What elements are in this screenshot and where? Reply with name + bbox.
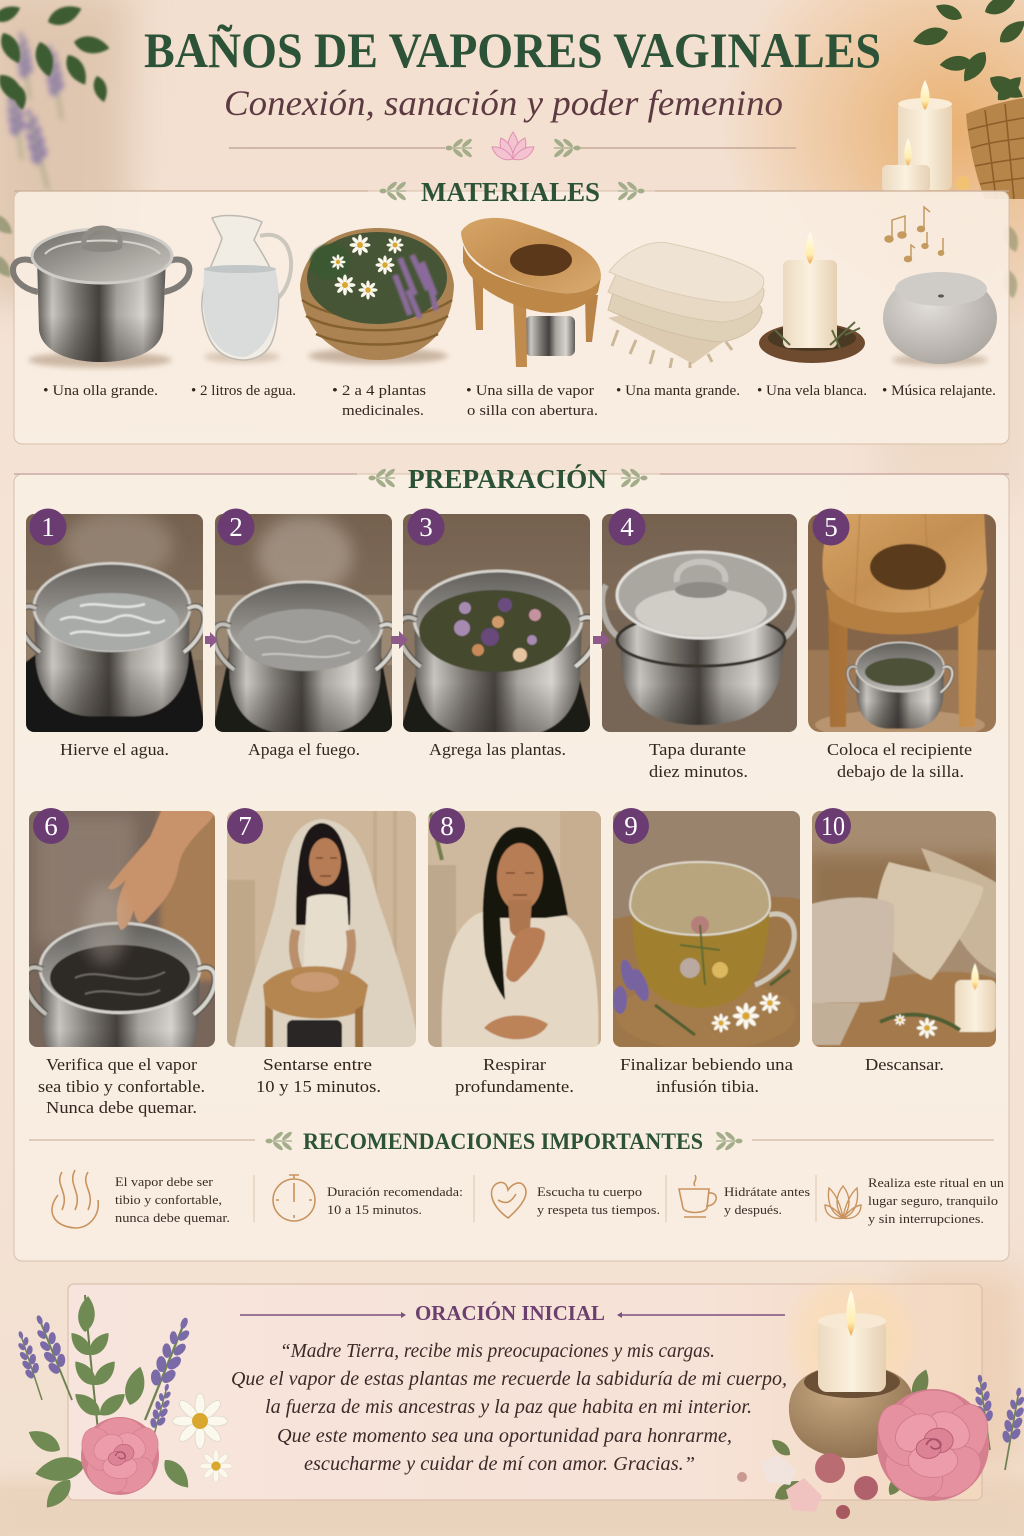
recommendation: cuerpo: y respeta tus tiempos. [537,1202,660,1217]
step 3 photo [398,510,598,736]
step 6 caption: Nunca debe quemar. [46,1098,197,1117]
floral arrangement: left [11,1295,232,1513]
prayer text [231,1340,787,1475]
item labels: o silla con abertura. [467,403,598,419]
step 7 caption [256,1055,381,1096]
step 7 caption: 10 y 15 minutos. [256,1077,381,1096]
step 6 caption [38,1055,205,1117]
step 10 photo [808,807,1000,1051]
title: BAÑOS DE VAPORES VAGINALES [144,22,881,78]
item labels: • Una silla de vapor [466,383,594,399]
step 7 photo [223,807,420,1054]
item labels: medicinales. [342,403,424,419]
panel: oración inicial [68,1284,982,1500]
panel: materiales [13,177,1009,444]
item labels [43,383,996,419]
recommendation: cuerpo: Escucha tu cuerpo [537,1184,642,1199]
step 8 caption: profundamente. [455,1077,574,1096]
plants and candles: top right [882,0,1024,199]
subtitle: Conexión, sanación y poder femenino [224,83,783,123]
item labels: • 2 a 4 plantas [332,383,426,399]
step number badges: 1 [41,512,55,542]
step 1 photo [19,510,207,736]
recommendation: lugar seguro: Realiza este ritual en un [868,1175,1005,1190]
panel: preparación y recomendaciones [14,464,1009,1261]
recommendation: duración [273,1175,463,1221]
item labels: • Una manta grande. [616,383,740,399]
step 9 caption: Finalizar bebiendo una [620,1055,794,1074]
step number badges: 2 [229,512,243,542]
heading: materiales [14,177,1009,207]
step 4 caption: diez minutos. [649,762,748,781]
prayer text: la fuerza de mis ancestras y la paz que habita en mi interior. [265,1396,752,1418]
item labels: • Una vela blanca. [757,383,867,399]
heading: recomendaciones importantes [29,1129,994,1154]
step number badges [30,508,851,844]
arrow 3 [593,631,610,649]
recommendation: duración: Duración recomendada: [327,1184,463,1199]
prayer text: Que este momento sea una oportunidad para honrarme, [277,1425,732,1447]
step 1 caption: Hierve el agua. [60,740,169,759]
plants: top left [0,1,111,193]
recommendation: hidratación: Hidrátate antes [724,1184,810,1199]
item labels: • 2 litros de agua. [191,383,296,399]
heading: oración inicial [240,1301,785,1325]
recommendation: hidratación: y después. [724,1202,782,1217]
recommendation: vapor: El vapor debe ser [115,1174,214,1189]
item: silla de vapor [461,218,601,367]
item: cesta de plantas [300,228,454,364]
recommendation: cuerpo [492,1182,660,1218]
step number badges: 7 [238,811,252,841]
step 6 caption: sea tibio y confortable. [38,1077,205,1096]
item: vela blanca [759,232,865,363]
arrow 2 [391,631,408,649]
step 6 photo [29,811,215,1047]
step 6 caption: Verifica que el vapor [46,1055,197,1074]
recommendation: vapor [52,1170,230,1228]
step 4 photo [598,510,801,736]
item labels: • Una olla grande. [43,383,158,399]
step 4 caption: Tapa durante [649,740,746,759]
arrow 1 [205,632,218,648]
candle in stone bowl with rose [737,1280,1024,1519]
recommendation: vapor: tibio y confortable, [115,1192,222,1207]
step number badges: 8 [440,811,454,841]
step 5 caption [827,740,972,781]
step 2 caption: Apaga el fuego. [248,740,360,759]
recommendation: vapor: nunca debe quemar. [115,1210,230,1225]
heading: preparación [14,464,1009,494]
step 8 photo [424,807,605,1051]
recommendation: lugar seguro: lugar seguro, tranquilo [868,1193,998,1208]
step 10 caption: Descansar. [865,1055,944,1074]
step 9 caption [620,1055,794,1096]
step 5 photo [804,510,1000,740]
recommendation: lugar seguro: y sin interrupciones. [868,1211,984,1226]
step 8 caption: Respirar [483,1055,546,1074]
step 8 caption [455,1055,574,1096]
step number badges: 3 [419,512,433,542]
step 7 caption: Sentarse entre [263,1055,372,1074]
step 9 caption: infusión tibia. [656,1077,759,1096]
item: manta [608,242,764,368]
item: altavoz con notas musicales [883,207,997,366]
prayer text: Que el vapor de estas plantas me recuerde la sabiduría de mi cuerpo, [231,1368,787,1390]
step number badges: 9 [624,811,638,841]
step number badges: 5 [824,512,838,542]
step number badges: 10 [821,811,845,841]
item: jarra [202,215,291,363]
item: olla [13,228,189,368]
step 5 caption: Coloca el recipiente [827,740,972,759]
title divider with lotus [229,132,796,160]
step 3 caption: Agrega las plantas. [429,740,566,759]
heading: oración inicial: ORACIÓN INICIAL [415,1301,605,1325]
step 5 caption: debajo de la silla. [837,762,964,781]
prayer text: “Madre Tierra, recibe mis preocupaciones y mis cargas. [280,1340,715,1362]
step 9 photo [609,807,804,1051]
prayer text: escucharme y cuidar de mí con amor. Gracias.” [304,1453,695,1475]
recommendation: hidratación [679,1175,810,1217]
recommendation: duración: 10 a 15 minutos. [327,1202,422,1217]
step 4 caption [649,740,748,781]
heading: recomendaciones importantes: RECOMENDACIONES IMPORTANTES [303,1129,703,1154]
heading: materiales: MATERIALES [421,177,600,207]
step number badges: 6 [44,811,58,841]
step number badges: 4 [620,512,634,542]
step 2 photo [211,510,397,736]
recommendation: lugar seguro [825,1175,1005,1226]
heading: preparación: PREPARACIÓN [408,464,607,494]
item labels: • Música relajante. [882,383,996,399]
